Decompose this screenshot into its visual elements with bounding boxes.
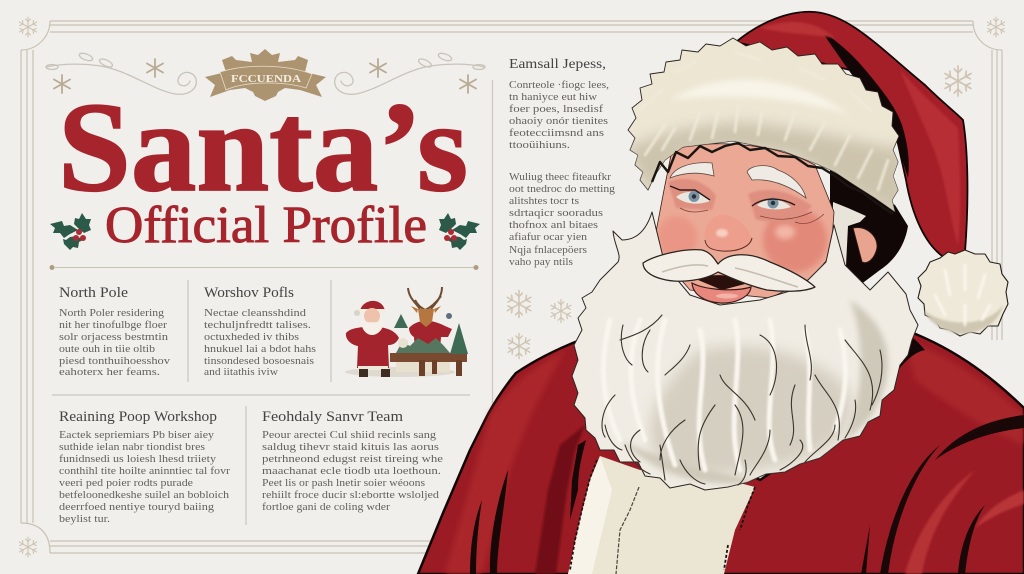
panel: Eamsall Jepess: foer poes, lnsedisf — [509, 104, 604, 115]
panel: North Pole: nit her tinofulbge floer — [59, 320, 168, 331]
panel: Eamsall Jepess: sdrtaqicr sooradus — [509, 208, 603, 219]
face — [656, 144, 834, 298]
panel: Feohdaly Sanvr Team: rehiilt froce ducir sl:ebortte wsloljed — [262, 490, 440, 501]
panel: Eamsall Jepess: Wuliug theec fiteaufkr — [509, 172, 612, 183]
panel: Feohdaly Sanvr Team: fortloe gani de coling wder — [262, 502, 391, 513]
panel: Worshov Pofls: and iitathis iviw — [204, 367, 278, 378]
illustration: Santa portrait — [418, 12, 1024, 574]
holly: right — [439, 213, 480, 250]
panel: Eamsall Jepess: thofnox anl bitaes — [509, 220, 598, 231]
asterisk ornament 2 — [147, 59, 163, 77]
beard — [572, 212, 918, 490]
panel: North Pole — [59, 285, 171, 378]
panel: North Pole: eahoterx her feams. — [59, 367, 160, 378]
panel: Reaining Poop Workshop: Reaining Poop Workshop — [59, 409, 217, 425]
panel: Worshov Pofls: Nectae cleansshdind — [204, 308, 307, 319]
panel: Worshov Pofls — [204, 285, 316, 378]
panel: Eamsall Jepess: ohaoiy onór tienites — [509, 116, 608, 127]
mouth — [692, 275, 751, 303]
panel: Feohdaly Sanvr Team: petrhneond edugst reist tireing whe — [262, 454, 443, 465]
asterisk ornament 1 — [54, 75, 70, 93]
asterisk ornament 3 — [370, 59, 386, 77]
panel: Feohdaly Sanvr Team: Peour arectei Cul shiid recinls sang — [262, 430, 437, 441]
snowflake: beard left middle — [551, 300, 571, 322]
panel: Reaining Poop Workshop: deerrfoed nentiye touryd baiing — [59, 502, 215, 513]
holly: left — [50, 213, 91, 250]
panel: North Pole: North Poler residering — [59, 308, 165, 319]
moustache — [643, 250, 815, 291]
panel: North Pole: solr orjacess bestmtin — [59, 332, 169, 343]
asterisk ornament 4 — [460, 75, 476, 93]
panel: North Pole: piesd tonthuihoesshov — [59, 356, 171, 367]
panel: Reaining Poop Workshop: conthihl tite hoilte aninntiec tal fovr — [59, 466, 231, 477]
ear — [853, 227, 877, 263]
coat — [418, 327, 1024, 574]
fur placket — [568, 456, 755, 574]
subtitle: Official Profile: Official Profile — [105, 197, 427, 254]
corner snowflake: bottom left — [19, 537, 37, 557]
corner snowflake: top left — [19, 17, 37, 37]
panel: Worshov Pofls: octuxheded iv thibs — [204, 332, 299, 343]
panel: Reaining Poop Workshop: betfeloonedkeshe suilel an bobloich — [59, 490, 230, 501]
ribbon badge — [205, 49, 326, 101]
panel: Worshov Pofls: techuljnfredtt talises. — [204, 320, 311, 331]
panel: Feohdaly Sanvr Team: Feohdaly Sanvr Team — [262, 409, 403, 425]
title divider — [50, 265, 478, 270]
side hair — [832, 202, 866, 266]
panel: North Pole: oute ouh in tiie oltib — [59, 344, 155, 355]
hair shadow — [830, 170, 908, 285]
panel: Eamsall Jepess: ttooüihiuns. — [509, 140, 570, 151]
title: Santa's: Santa’s — [58, 76, 468, 218]
panel: Eamsall Jepess: oot tnedroc do metting — [509, 184, 616, 195]
panel: Feohdaly Sanvr Team — [262, 409, 443, 513]
panel: Reaining Poop Workshop: suthide ielan nabr tiondist bres — [59, 442, 205, 453]
panel: Worshov Pofls: tinsondesed bosoesnais — [204, 356, 314, 367]
panel: North Pole: North Pole — [59, 285, 128, 301]
panel: Eamsall Jepess — [509, 57, 616, 268]
panel: Feohdaly Sanvr Team: Peet lis or pash lnetir soier wéoons — [262, 478, 425, 489]
illustration: Santa and reindeer at workbench — [345, 287, 468, 377]
panel: Eamsall Jepess: vaho pay ntils — [509, 257, 573, 268]
hat — [736, 12, 967, 258]
snowflake: beard left bottom — [508, 334, 530, 358]
panel: Reaining Poop Workshop: veeri ped poier rodts purade — [59, 478, 193, 489]
panel: Eamsall Jepess: afiafur ocar yien — [509, 232, 588, 243]
panel: Eamsall Jepess: Nqja fnlacepöers — [509, 245, 587, 256]
panel: Reaining Poop Workshop: funidnsedi us loiesh lhesd triiety — [59, 454, 217, 465]
flourish: right — [335, 52, 485, 94]
eyebrows — [670, 163, 806, 198]
panel: Feohdaly Sanvr Team: saldug tihevr staid kituis las aorus — [262, 442, 439, 453]
panel: Reaining Poop Workshop: Eactek sepriemiars Pb biser aiey — [59, 430, 215, 441]
snowflake: right of hat — [945, 66, 971, 96]
panel: Reaining Poop Workshop — [59, 409, 231, 525]
corner snowflake: top right — [987, 17, 1005, 37]
panel: Eamsall Jepess: alitshtes tocr ts — [509, 196, 579, 207]
panel: Worshov Pofls: hnukuel lai a bdot hahs — [204, 344, 316, 355]
snowflake: beard left top — [507, 290, 531, 318]
panel: Eamsall Jepess: Conrteole ·fiogc lees, — [509, 80, 609, 91]
pompom — [918, 250, 1008, 336]
fur hat band — [625, 38, 905, 220]
section dividers — [52, 280, 470, 525]
flourish: left — [46, 52, 196, 94]
panel: Worshov Pofls: Worshov Pofls — [204, 285, 294, 301]
ribbon badge: FCCUENDA — [231, 73, 301, 85]
panel: Eamsall Jepess: tn haniyce eut hiw — [509, 92, 597, 103]
panel: Feohdaly Sanvr Team: maachanat ecle tiodb uta loethoun. — [262, 466, 441, 477]
panel: Eamsall Jepess: feotecciimsnd ans — [509, 128, 604, 139]
panel: Reaining Poop Workshop: beylist tur. — [59, 514, 110, 525]
panel: Eamsall Jepess: Eamsall Jepess, — [509, 57, 606, 72]
